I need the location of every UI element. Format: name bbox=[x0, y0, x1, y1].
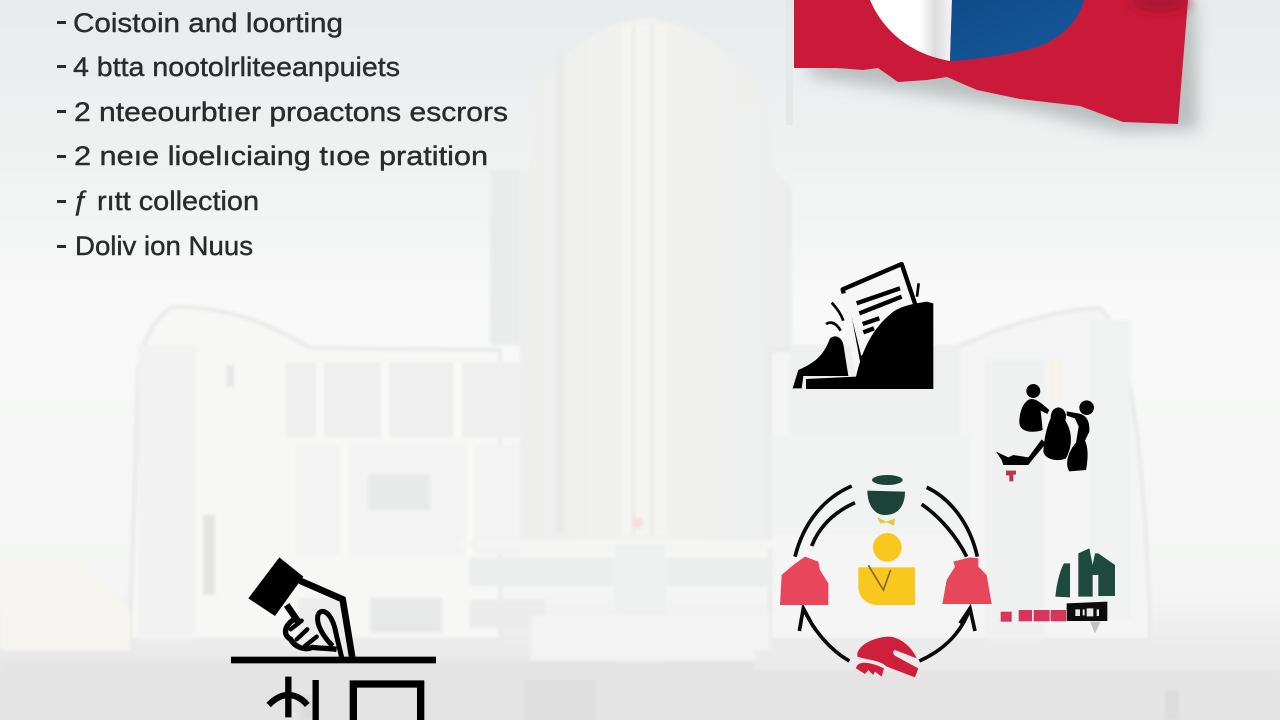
box glyph bbox=[269, 677, 316, 720]
flag red field bbox=[794, 0, 1188, 124]
small marker bbox=[632, 518, 642, 528]
flag bbox=[786, 0, 1198, 132]
red handshake bbox=[856, 637, 918, 677]
cuff bbox=[248, 557, 303, 616]
tiny red mark bbox=[1006, 471, 1016, 481]
upper tower block bbox=[490, 18, 792, 540]
white edge bbox=[844, 293, 859, 376]
icon: newspaper and hand bbox=[793, 264, 933, 389]
ballot slot line bbox=[231, 657, 436, 663]
label marks bbox=[1075, 608, 1099, 616]
entrance band bbox=[470, 558, 770, 586]
person left bbox=[1019, 384, 1049, 432]
icon: ballot box with hand bbox=[231, 557, 436, 720]
ground band bbox=[0, 662, 1280, 720]
icon: green building with label bbox=[1001, 548, 1115, 633]
black label bbox=[1067, 602, 1107, 621]
yellow person bbox=[858, 533, 915, 605]
flag pole bbox=[786, 0, 793, 125]
arm and small object bbox=[996, 439, 1046, 465]
collar bbox=[868, 565, 891, 590]
red bag right bbox=[942, 557, 992, 604]
red blocks bbox=[1001, 610, 1066, 622]
list item 3: 2 nteeourbtıer proactons escrors bbox=[74, 97, 508, 127]
hand outline bbox=[287, 581, 353, 660]
flag white half bbox=[870, 0, 952, 61]
right wing bbox=[770, 308, 1150, 640]
black mass bbox=[806, 302, 933, 389]
text list bbox=[57, 8, 508, 261]
list item 6: Doliv ion Nuus bbox=[75, 231, 253, 261]
cycle arcs bbox=[795, 486, 977, 661]
low-left houses bbox=[0, 560, 130, 650]
list item 1: Coistoin and loorting bbox=[73, 8, 343, 38]
paper bbox=[843, 264, 916, 360]
person middle bbox=[1043, 407, 1071, 460]
green figure bbox=[867, 475, 905, 515]
flag shadow bbox=[810, 0, 1198, 132]
finger separators bbox=[291, 621, 317, 646]
motion ticks bbox=[826, 283, 919, 331]
flag blue half bbox=[950, 0, 1084, 61]
list item 2: 4 btta nootolrliteeanpuiets bbox=[73, 52, 400, 82]
label stem bbox=[1090, 622, 1101, 633]
thumb bbox=[318, 611, 343, 662]
person right bbox=[1067, 400, 1094, 471]
cycle diagram bbox=[780, 475, 992, 677]
box outline bbox=[353, 684, 421, 720]
green shapes bbox=[1055, 548, 1115, 597]
curled fingers bbox=[286, 619, 337, 649]
yellow tie knot bbox=[877, 517, 895, 526]
red bag left bbox=[780, 557, 828, 605]
list item 4: 2 neıe lioelıciaing tıoe pratition bbox=[74, 141, 488, 171]
list item 5: ƒ rıtt collection bbox=[73, 186, 259, 216]
flag fold bbox=[1130, 0, 1190, 13]
icon: people group bbox=[996, 384, 1094, 481]
hand silhouette bbox=[793, 336, 848, 388]
paper text lines bbox=[857, 288, 902, 332]
left wing bbox=[130, 307, 500, 640]
